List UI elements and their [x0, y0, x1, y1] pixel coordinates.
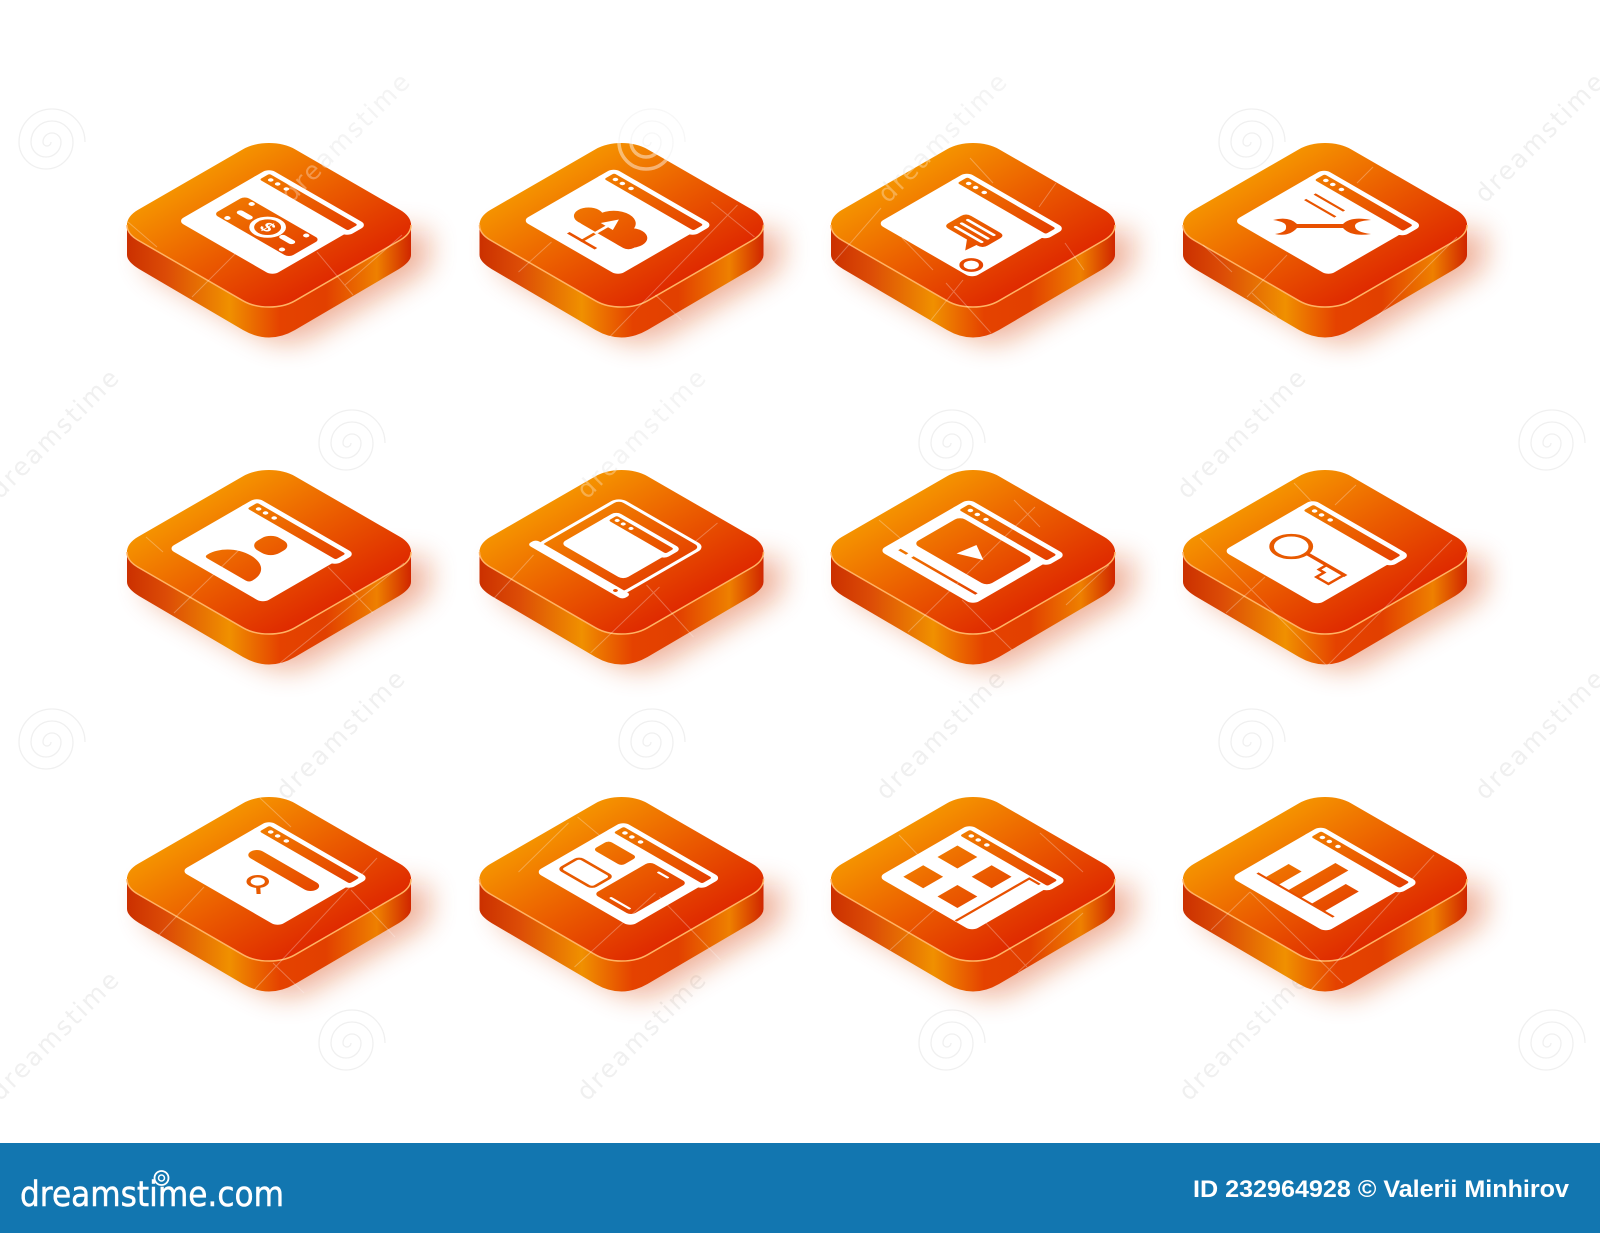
icon tile: key browser [1168, 461, 1485, 669]
watermark text: dreamstime [872, 68, 1012, 208]
watermark text: dreamstime [1173, 966, 1313, 1106]
watermark text: dreamstime [1171, 364, 1311, 504]
icon tile: laptop browser [464, 461, 782, 669]
icon tile: cloud upload browser [464, 134, 782, 342]
icon tile: bar chart browser [1168, 788, 1485, 996]
watermark text: dreamstime [275, 68, 415, 208]
icon tile: chat browser [816, 134, 1133, 342]
watermark text: dreamstime [870, 665, 1010, 805]
brand logo: dreamstime.com [20, 1175, 284, 1215]
icon tile: layout browser [464, 788, 782, 996]
icon tile: video browser [816, 461, 1133, 669]
watermark text: dreamstime [270, 665, 410, 805]
icon tile: money browser: $ [255, 220, 281, 235]
watermark overlay on tiles: dreamstime [571, 364, 711, 504]
footer banner [0, 1143, 1600, 1233]
watermark overlay on tiles: dreamstime [872, 68, 1012, 208]
watermark text: dreamstime [571, 966, 711, 1106]
icon tile: wrench browser [1168, 134, 1485, 342]
icon tile: search browser [112, 788, 429, 996]
icon tile: user profile browser [112, 461, 429, 669]
watermark spirals [19, 109, 1585, 1070]
watermark overlay on tiles: dreamstime [275, 68, 415, 208]
image id and credit: ID 232964928 © Valerii Minhirov [1193, 1176, 1570, 1203]
icon tile: money browser [112, 134, 429, 342]
watermark overlay on tiles [275, 68, 1012, 504]
watermark text: dreamstime [571, 364, 711, 504]
icon tile: grid browser [816, 788, 1133, 996]
